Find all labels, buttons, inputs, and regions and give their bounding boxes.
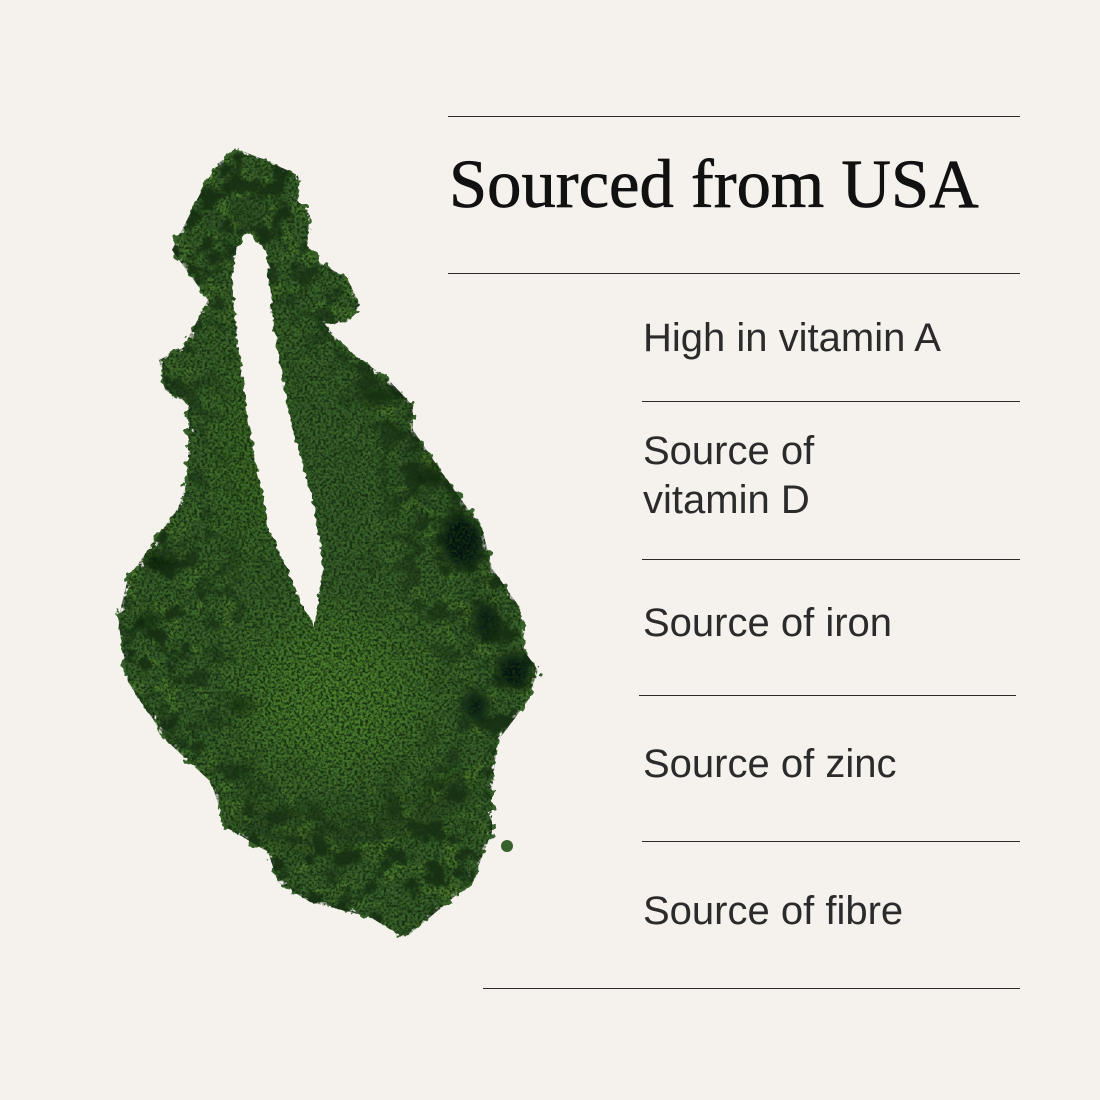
title: Sourced from USA [449,146,979,222]
clean white groove [232,232,324,628]
benefit: fibre: Source of fibre [643,889,903,933]
mound shading [100,140,550,950]
benefit: vitamin D: Source of [643,429,814,473]
deep crevices [136,389,531,779]
benefit: zinc: Source of zinc [643,742,896,786]
powder base silhouette [118,150,538,938]
benefit: vitamin D [643,429,814,522]
powder grain texture [100,140,550,950]
benefit: vitamin D: vitamin D [643,478,810,522]
clumps near the rim [100,140,550,950]
illustration: green powder mound [115,148,543,938]
stray powder speck [501,840,513,852]
rule under title [448,273,1020,274]
benefit: iron: Source of iron [643,601,892,645]
top rule [448,116,1020,117]
benefit: vitamin A: High in vitamin A [643,316,941,360]
